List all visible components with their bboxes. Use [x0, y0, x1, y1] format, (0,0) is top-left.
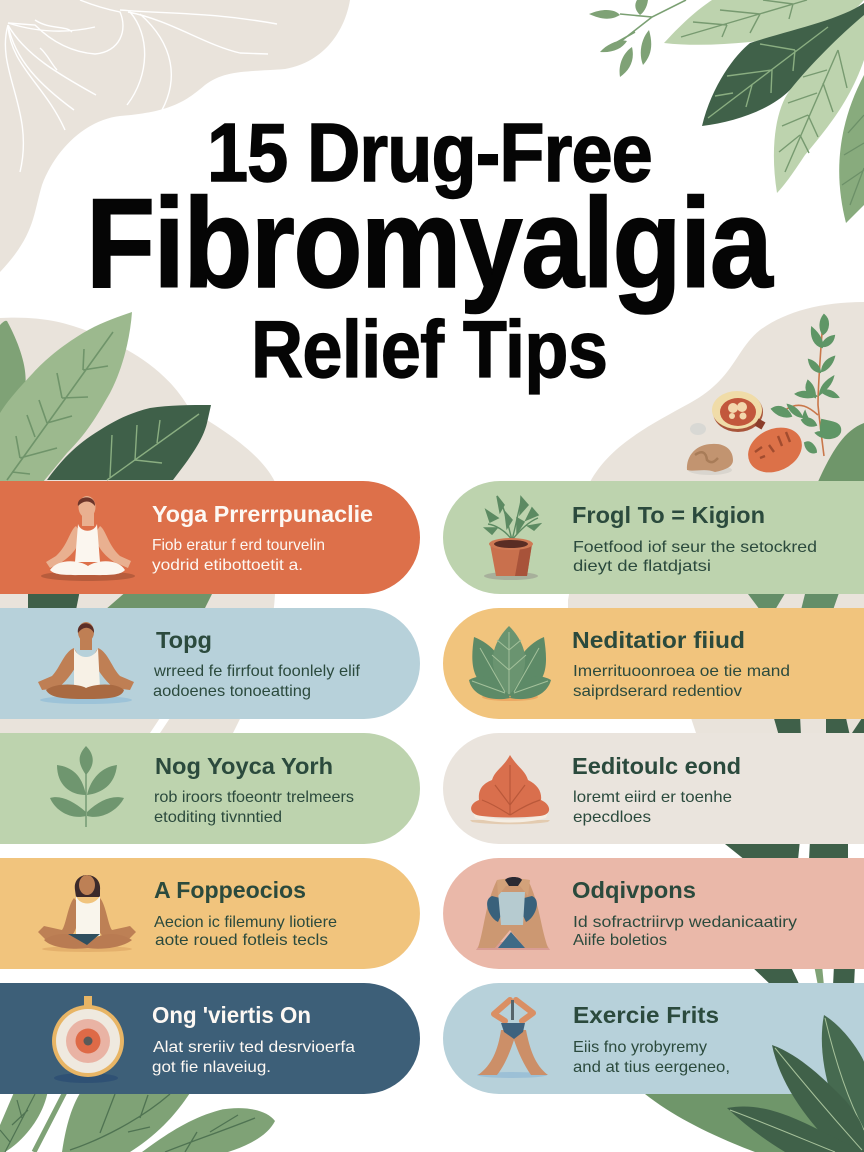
description: etoditing tivnntied: [154, 809, 282, 826]
background blob: top left with white veins: [0, 0, 350, 272]
heading: Ong 'viertis On: [152, 1002, 311, 1028]
leaf stems below first pill: [28, 590, 80, 610]
pill: [0, 983, 420, 1094]
leaves: top right cluster: [589, 0, 864, 223]
leaf: medium edge: [839, 75, 864, 223]
pill: [443, 858, 864, 969]
icon: meditating person: [41, 496, 135, 581]
panel: row 4 right, pink stretch: [443, 858, 864, 969]
leaf: right of food illustration: [817, 423, 864, 484]
background blob: right middle: [568, 302, 864, 830]
pill: [0, 733, 420, 844]
pill: [0, 481, 420, 594]
description: got fie nlaveiug.: [152, 1059, 271, 1076]
panel: row 5 right, blue exercise: [443, 983, 864, 1094]
icon: leaf sprig: [50, 746, 124, 827]
leaf: dark: [47, 405, 211, 480]
heading: Topg: [156, 627, 212, 653]
icon: layered red leaf: [470, 755, 550, 824]
description: dieyt de flatdjatsi: [573, 558, 711, 575]
leaf: dark: [702, 3, 864, 126]
description: [154, 914, 337, 949]
leaf: large bottom right background: [640, 1090, 864, 1152]
panel: row 1 left, orange yoga: [0, 481, 420, 594]
leaf: medium edge: [0, 321, 26, 418]
description: saiprdserard redentiov: [573, 683, 742, 700]
heading: Nog Yoyca Yorh: [155, 753, 333, 779]
heading: Odqivpons: [572, 877, 696, 903]
pill: [0, 608, 420, 719]
panel: row 2 left, blue yoga: [0, 608, 420, 719]
heading: A Foppeocios: [154, 877, 306, 903]
icon: standing exercise figure: [477, 1000, 548, 1078]
description: Fiob eratur f erd tourvelin: [152, 537, 325, 554]
description: [573, 789, 732, 826]
description: [154, 789, 354, 826]
title line 3: Relief Tips: [251, 305, 607, 395]
icon: lotus of leaves: [469, 626, 551, 701]
leaf: diagonal: [772, 1045, 864, 1152]
white gap in left blob: [148, 715, 172, 736]
icon: potted plant: [484, 496, 540, 580]
icon: figure stretching: [476, 877, 550, 950]
description: [573, 914, 797, 949]
panel: row 3 right, beige autumn leaf: [443, 733, 864, 844]
leaves: bottom left cluster: [0, 1090, 275, 1152]
description: Id sofractriirvp wedanicaatiry: [573, 914, 797, 931]
description: Imerrituoonroea oe tie mand: [573, 663, 790, 680]
description: Foetfood iof seur the setockred: [573, 539, 817, 556]
stone: [690, 423, 706, 435]
pill: [443, 983, 864, 1094]
leaves: bottom right foreground: [727, 1015, 864, 1152]
description: and at tius eergeneo,: [573, 1059, 730, 1076]
sprig: [589, 0, 686, 77]
description: epecdloes: [573, 809, 651, 826]
background blob: left middle: [0, 318, 275, 790]
leaf: right: [142, 1108, 275, 1152]
description: Eiis fno yrobyremy: [573, 1039, 707, 1056]
pill: [443, 608, 864, 719]
leaf: light right: [774, 15, 864, 193]
heading: Neditatior fiiud: [572, 627, 745, 653]
description: Aiife boletios: [573, 932, 667, 949]
description: wrreed fe firrfout foonlely elif: [153, 663, 361, 680]
description: aote roued fotleis tecls: [155, 932, 328, 949]
description: [153, 663, 361, 700]
pill: [0, 858, 420, 969]
description: [573, 1039, 730, 1076]
panel: row 4 left, yellow yoga: [0, 858, 420, 969]
heading: Eeditoulc eond: [572, 753, 741, 779]
leaf: left: [0, 1090, 48, 1152]
title line 1: 15 Drug-Free: [207, 106, 652, 199]
heading: Exercie Frits: [573, 1002, 719, 1028]
description: loremt eiird er toenhe: [573, 789, 732, 806]
description: Aecion ic filemuny liotiere: [154, 914, 337, 931]
leaf: centre: [62, 1090, 192, 1152]
title: [86, 106, 774, 395]
herb sprig: [772, 315, 840, 456]
leaf: light top: [664, 0, 864, 45]
description: rob iroors tfoeontr trelmeers: [154, 789, 354, 806]
heading: Yoga Prrerrpunaclie: [152, 501, 373, 527]
description: [152, 537, 325, 574]
panel: row 5 left, navy timer: [0, 983, 420, 1094]
pill: [443, 733, 864, 844]
description: yodrid etibottoetit a.: [152, 557, 303, 574]
panel: row 3 left, green sprig: [0, 733, 420, 844]
panel: row 2 right, yellow leaves: [443, 608, 864, 719]
bowl: [712, 391, 765, 432]
description: [573, 663, 790, 700]
description: aodoenes tonoeatting: [153, 683, 311, 700]
leaf: upright: [822, 1015, 864, 1152]
title line 2: Fibromyalgia: [86, 173, 774, 314]
heading: Frogl To = Kigion: [572, 502, 765, 528]
leaves: behind right pills: [720, 590, 864, 986]
pill: [443, 481, 864, 594]
leaves: left middle cluster: [0, 312, 214, 736]
description: Alat sreriiv ted desrvioerfa: [153, 1039, 355, 1056]
icon: food and herbs illustration: [687, 315, 840, 481]
leaf: sage: [0, 312, 132, 482]
description: [152, 1039, 355, 1076]
icon: meditating person: [38, 622, 134, 704]
root tuber: [687, 444, 733, 475]
icon: round timer target: [52, 996, 124, 1083]
sweet potato: [741, 419, 809, 481]
leaf: lower: [727, 1107, 864, 1152]
panel: row 1 right, green plant: [443, 481, 864, 594]
icon: meditating person: [38, 875, 136, 952]
stem: [34, 1090, 66, 1152]
description: [573, 539, 817, 575]
